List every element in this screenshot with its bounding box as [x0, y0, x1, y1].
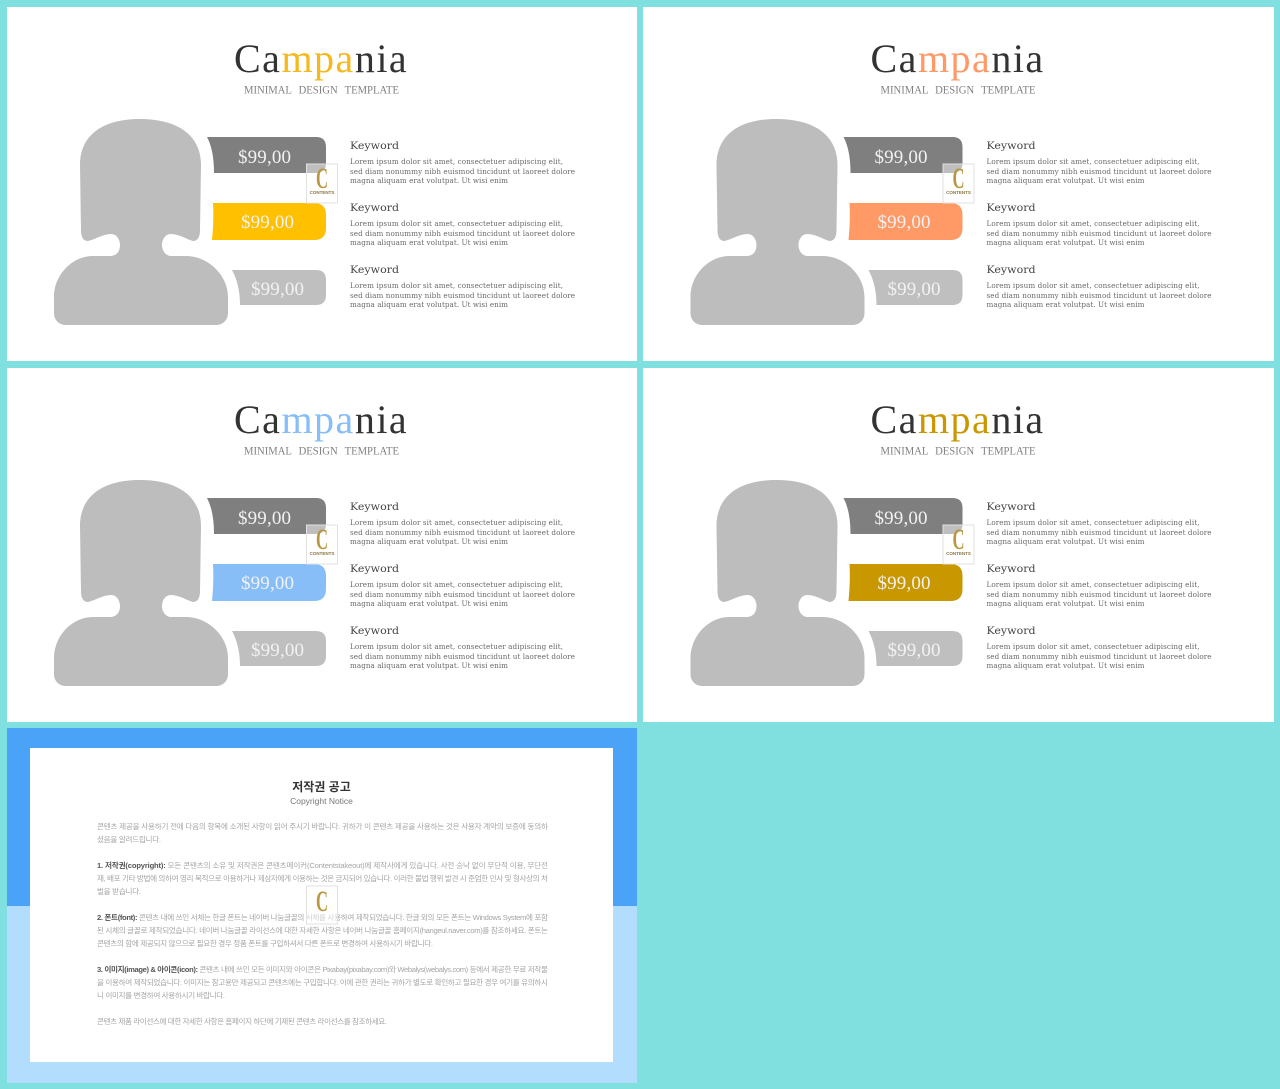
price tag: bottom: $99,00	[888, 640, 940, 661]
icon: watermark badge	[943, 523, 974, 564]
text block: keyword 3: magna aliquam erat volutpat. Ut wisi enim	[986, 300, 1145, 309]
text block: keyword 2: sed diam nonummy nibh euismod tincidunt ut laoreet dolore	[986, 590, 1212, 599]
text block: keyword 1: Lorem ipsum dolor sit amet, consectetuer adipiscing elit,	[986, 157, 1200, 166]
price tag: top: $99,00	[874, 508, 928, 529]
heading: copyright: 저작권 공고	[292, 779, 351, 794]
text block: keyword 1	[350, 501, 575, 546]
icon: person silhouette	[690, 480, 864, 686]
text block: keyword 3: magna aliquam erat volutpat. Ut wisi enim	[350, 300, 508, 309]
subtitle: MINIMAL DESIGN TEMPLATE	[244, 444, 399, 458]
text block: intro: 콘텐츠 제공을 사용하기 전에 다음의 항목에 소개된 사항이 읽어 주시기 바랍니다. 귀하가 이 콘텐츠 제공을 사용하는 것은 사용자 계약의 보증에 동의하	[97, 821, 548, 831]
text block: keyword 1: Lorem ipsum dolor sit amet, consectetuer adipiscing elit,	[350, 157, 563, 166]
text block: keyword 2: Keyword	[986, 563, 1036, 575]
text block: keyword 3: Keyword	[350, 264, 399, 276]
subtitle: MINIMAL DESIGN TEMPLATE	[880, 82, 1036, 96]
text block: keyword 1: Lorem ipsum dolor sit amet, consectetuer adipiscing elit,	[350, 518, 563, 527]
price tag: middle: $99,00	[241, 573, 294, 594]
icon: watermark badge	[306, 523, 338, 564]
text block: keyword 2: magna aliquam erat volutpat. Ut wisi enim	[350, 599, 508, 608]
text block: intro	[97, 821, 548, 844]
title: Campania	[234, 397, 408, 442]
icon: watermark badge	[306, 885, 338, 924]
text block: keyword 3: Lorem ipsum dolor sit amet, consectetuer adipiscing elit,	[986, 642, 1200, 651]
text block: keyword 1: sed diam nonummy nibh euismod tincidunt ut laoreet dolore	[350, 167, 575, 176]
text block: keyword 1: magna aliquam erat volutpat. Ut wisi enim	[350, 176, 508, 185]
icon: person silhouette	[54, 480, 228, 686]
panel: slide yellow	[7, 7, 637, 361]
price tag: middle	[212, 564, 326, 601]
text block: keyword 2: sed diam nonummy nibh euismod tincidunt ut laoreet dolore	[986, 229, 1212, 238]
text block: keyword 1: sed diam nonummy nibh euismod tincidunt ut laoreet dolore	[986, 528, 1212, 537]
text block: keyword 2: sed diam nonummy nibh euismod tincidunt ut laoreet dolore	[350, 590, 575, 599]
icon: watermark badge	[306, 162, 338, 203]
title: Campania	[234, 36, 408, 81]
price tag: top: $99,00	[238, 147, 291, 168]
icon: watermark badge: C	[316, 885, 328, 918]
icon: person silhouette	[54, 119, 228, 325]
text block: keyword 3: Keyword	[986, 625, 1036, 637]
text block: closing: 콘텐츠 제품 라이선스에 대한 자세한 사항은 홈페이지 하단에 기재된 콘텐츠 라이선스를 참조하세요.	[97, 1016, 387, 1026]
icon: watermark badge: C	[952, 523, 964, 556]
icon: person silhouette	[690, 119, 864, 325]
text block: keyword 2: Keyword	[986, 202, 1036, 214]
price tag: bottom	[232, 270, 326, 305]
text block: keyword 1	[986, 501, 1212, 546]
text block: keyword 1: Keyword	[986, 501, 1036, 513]
price tag: middle	[212, 203, 326, 240]
text block: section 1: 벌을 받습니다.	[97, 886, 141, 896]
text block: keyword 3: Lorem ipsum dolor sit amet, consectetuer adipiscing elit,	[986, 281, 1200, 290]
text block: section 2: 콘텐츠의 함에 제공되지 않으므로 필요한 경우 정품 폰트를 구입하셔서 다른 폰트로 변경하여 사용하시기 바랍니다.	[97, 938, 433, 948]
text block: keyword 1: magna aliquam erat volutpat. Ut wisi enim	[986, 176, 1145, 185]
text block: keyword 1: Lorem ipsum dolor sit amet, consectetuer adipiscing elit,	[986, 518, 1200, 527]
text block: keyword 3: magna aliquam erat volutpat. Ut wisi enim	[350, 661, 508, 670]
icon: watermark badge: CONTENTS	[310, 190, 334, 195]
price tag: bottom	[868, 270, 962, 305]
title: Campania	[870, 36, 1045, 81]
price tag: top	[844, 137, 962, 173]
text block: keyword 2: Keyword	[350, 563, 399, 575]
panel: slide orange	[643, 7, 1274, 361]
title: Campania	[870, 397, 1045, 442]
text block: keyword 3: Lorem ipsum dolor sit amet, consectetuer adipiscing elit,	[350, 281, 563, 290]
text block: keyword 2	[350, 563, 575, 608]
subtitle: MINIMAL DESIGN TEMPLATE	[244, 82, 399, 96]
text block: section 3: 3. 이미지(image) & 아이콘(icon): 콘텐츠 내에 쓰인 모든 이미지와 아이콘은 Pixabay(pixabay.com)와 Webalys(webalys.com) 등에서 제공한 무료 저작물	[97, 964, 548, 974]
icon: watermark badge: C	[952, 162, 964, 195]
icon: watermark badge: C	[316, 162, 328, 195]
text block: keyword 3	[986, 625, 1212, 670]
price tag: middle: $99,00	[878, 573, 930, 594]
icon: watermark badge: CONTENTS	[946, 190, 971, 195]
text block: keyword 1: Keyword	[350, 501, 399, 513]
text block: keyword 3: sed diam nonummy nibh euismod tincidunt ut laoreet dolore	[986, 291, 1212, 300]
text block: keyword 1: Keyword	[350, 140, 399, 152]
text block: keyword 1	[986, 140, 1212, 185]
text block: keyword 3	[350, 625, 575, 670]
text block: keyword 2: magna aliquam erat volutpat. Ut wisi enim	[350, 238, 508, 247]
price tag: top	[844, 498, 962, 534]
text block: keyword 2: Lorem ipsum dolor sit amet, consectetuer adipiscing elit,	[986, 219, 1200, 228]
text block: keyword 1	[350, 140, 575, 185]
panel: slide gold	[643, 368, 1274, 722]
subheading: Copyright Notice	[290, 796, 353, 806]
text block: keyword 2: Lorem ipsum dolor sit amet, consectetuer adipiscing elit,	[350, 219, 563, 228]
price tag: bottom: $99,00	[888, 279, 940, 300]
text block: section 1: 재, 배포 기타 방법에 의하여 영리 목적으로 이용하거나 제삼자에게 이용하는 것은 금지되어 있습니다. 이러한 불법 행위 발견 시 준엄한 민사 및 형사상의 처	[97, 873, 548, 883]
price tag: top	[207, 498, 326, 534]
text block: keyword 3: sed diam nonummy nibh euismod tincidunt ut laoreet dolore	[350, 291, 575, 300]
icon: watermark badge: CONTENTS	[946, 551, 971, 556]
price tag: bottom: $99,00	[251, 279, 304, 300]
text block: keyword 1: Keyword	[986, 140, 1036, 152]
text block: keyword 3: sed diam nonummy nibh euismod tincidunt ut laoreet dolore	[350, 652, 575, 661]
price tag: middle: $99,00	[241, 212, 294, 233]
text block: keyword 3	[986, 264, 1212, 309]
text block: keyword 1: magna aliquam erat volutpat. Ut wisi enim	[350, 537, 508, 546]
text block: section 3: 을 이용하여 제작되었습니다. 이미지는 참고용만 제공되고 콘텐츠에는 구입합니다. 이에 관한 권리는 귀하가 별도로 확인하고 필요한 경우 여기를 유의하시	[97, 977, 548, 987]
price tag: bottom	[868, 631, 962, 666]
text block: intro: 셨음을 알려드립니다.	[97, 834, 161, 844]
price tag: top	[207, 137, 326, 173]
text block: keyword 1: magna aliquam erat volutpat. Ut wisi enim	[986, 537, 1145, 546]
price tag: top: $99,00	[238, 508, 291, 529]
text block: keyword 2: Lorem ipsum dolor sit amet, consectetuer adipiscing elit,	[350, 580, 563, 589]
icon: watermark badge: C	[316, 523, 328, 556]
text block: section 3: 니 이미지를 변경하여 사용하시기 바랍니다.	[97, 990, 225, 1000]
subtitle: MINIMAL DESIGN TEMPLATE	[880, 444, 1036, 458]
text block: keyword 1: sed diam nonummy nibh euismod tincidunt ut laoreet dolore	[986, 167, 1212, 176]
text block: section 3	[97, 964, 548, 1000]
text block: keyword 2: sed diam nonummy nibh euismod tincidunt ut laoreet dolore	[350, 229, 575, 238]
text block: keyword 2: Keyword	[350, 202, 399, 214]
text block: keyword 3: Keyword	[986, 264, 1036, 276]
text block: keyword 2: magna aliquam erat volutpat. Ut wisi enim	[986, 599, 1145, 608]
panel: copyright notice	[7, 728, 637, 1083]
icon: watermark badge: CONTENTS	[310, 551, 334, 556]
text block: keyword 2	[986, 202, 1212, 247]
text block: section 1: 1. 저작권(copyright): 모든 콘텐츠의 소유 및 저작권은 콘텐츠메이커(Contentstakeout)에 제작사에게 있습니다. 사전 승낙 없이 무단적 이용, 무단전	[97, 860, 548, 870]
text block: keyword 3: Keyword	[350, 625, 399, 637]
panel: slide blue	[7, 368, 637, 722]
text block: keyword 3: magna aliquam erat volutpat. Ut wisi enim	[986, 661, 1145, 670]
price tag: middle	[848, 203, 962, 240]
price tag: bottom	[232, 631, 326, 666]
text block: keyword 2: Lorem ipsum dolor sit amet, consectetuer adipiscing elit,	[986, 580, 1200, 589]
price tag: middle	[848, 564, 962, 601]
text block: section 1	[97, 860, 548, 896]
text block: section 2	[97, 912, 548, 948]
icon: watermark badge	[943, 162, 974, 203]
text block: section 2: 된 시체의 글꼴로 제작되었습니다. 네이버 나눔글꼴 라이선스에 대한 자세한 사항은 네이버 나눔글꼴 홈페이지(hangeul.naver.com)를 참조하세요. 폰트는	[97, 925, 548, 935]
text block: keyword 3	[350, 264, 575, 309]
text block: section 2: 2. 폰트(font): 콘텐츠 내에 쓰인 서체는 한글 폰트는 네이버 나눔글꼴의 서체를 사용하여 제작되었습니다. 한글 외의 모든 폰트는 Windows System에 포함	[97, 912, 548, 922]
text block: keyword 3: Lorem ipsum dolor sit amet, consectetuer adipiscing elit,	[350, 642, 563, 651]
text block: keyword 2: magna aliquam erat volutpat. Ut wisi enim	[986, 238, 1145, 247]
price tag: top: $99,00	[874, 147, 928, 168]
text block: keyword 1: sed diam nonummy nibh euismod tincidunt ut laoreet dolore	[350, 528, 575, 537]
text block: keyword 2	[350, 202, 575, 247]
text block: keyword 2	[986, 563, 1212, 608]
price tag: middle: $99,00	[878, 212, 930, 233]
text block: keyword 3: sed diam nonummy nibh euismod tincidunt ut laoreet dolore	[986, 652, 1212, 661]
price tag: bottom: $99,00	[251, 640, 304, 661]
